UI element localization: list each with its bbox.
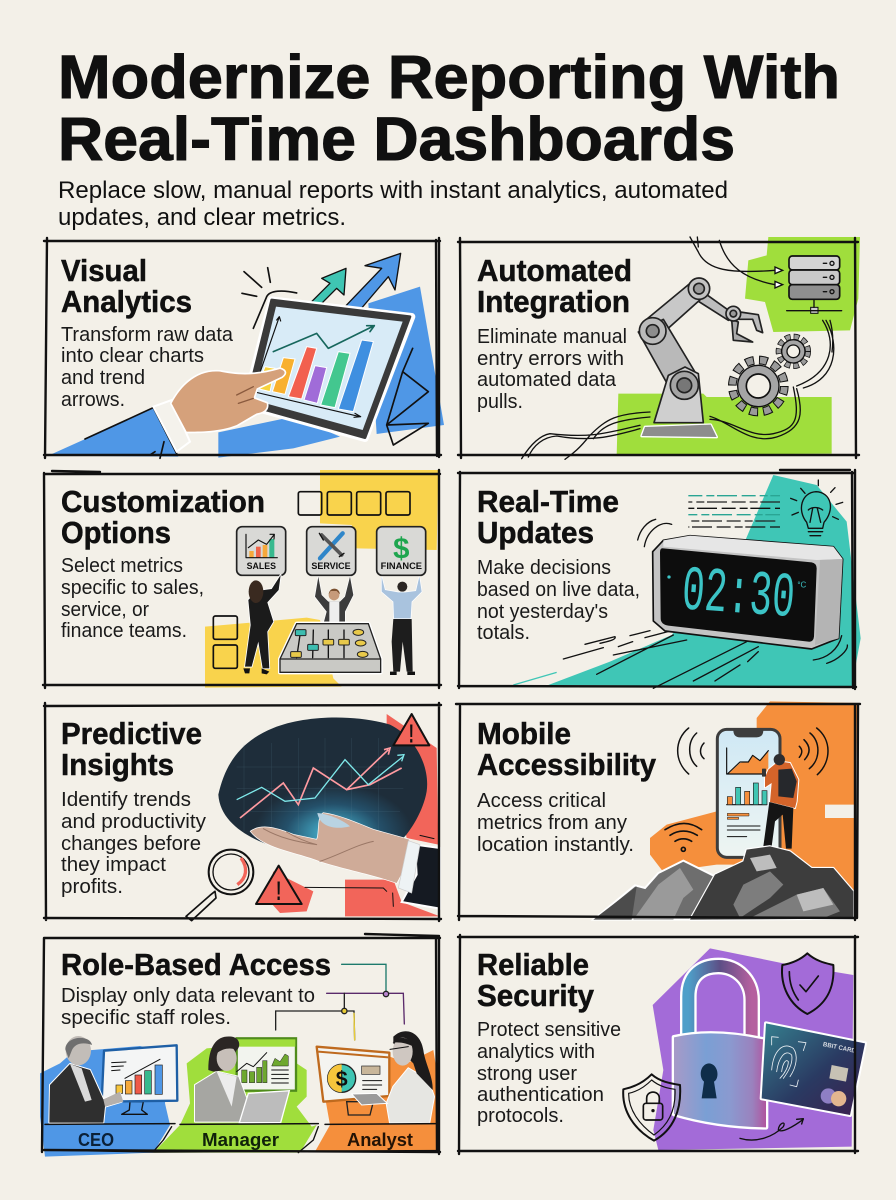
icon: warning triangle bottom: ! (276, 876, 281, 906)
CEO monitor (102, 1045, 177, 1114)
body text: into clear charts (61, 345, 204, 367)
body text: and productivity (61, 811, 206, 833)
body text: not yesterday's (477, 601, 608, 623)
illustration: hiker with phone on mountain (593, 701, 857, 920)
heading (477, 484, 619, 550)
illustration: robot arm, server, gears (522, 237, 860, 459)
padlock (674, 966, 766, 1127)
gears (732, 337, 808, 412)
card (762, 1023, 865, 1115)
body text: Select metrics (61, 555, 183, 577)
input wires (690, 237, 775, 285)
analyst monitor: $ (336, 1067, 348, 1091)
body text (477, 326, 627, 413)
hiker (762, 754, 798, 849)
panel: customization options (43, 470, 441, 688)
analyst person (352, 1031, 434, 1123)
heading (61, 253, 192, 319)
robot arm (638, 278, 763, 437)
heading: Integration (477, 284, 630, 319)
sign: service (307, 527, 356, 575)
body text: pulls. (477, 391, 523, 413)
body text: based on live data, (477, 579, 640, 601)
person: woman left (243, 575, 281, 674)
panel: automated integration (458, 237, 860, 459)
heading: Visual (61, 253, 147, 288)
title: Real-Time Dashboards (58, 105, 735, 173)
heading: Accessibility (477, 747, 657, 782)
heading: Security (477, 978, 595, 1013)
heading: Reliable (477, 947, 589, 982)
icon: warning triangle top (393, 714, 429, 749)
role labels: Manager (202, 1130, 279, 1150)
heading (477, 947, 595, 1013)
clock (653, 536, 843, 649)
illustration: tablet with chart and pointing hand (48, 253, 444, 458)
body text: authentication (477, 1084, 604, 1106)
body text (61, 789, 206, 898)
panel: mobile accessibility (456, 701, 860, 920)
clock: 02:30 (680, 556, 797, 636)
sleeve (402, 845, 440, 909)
body text (477, 1019, 621, 1127)
body text: profits. (61, 876, 123, 898)
panel: real-time updates (458, 470, 861, 689)
manager monitor (237, 1038, 296, 1091)
server stack (789, 256, 840, 313)
role labels (78, 1130, 413, 1150)
icon: warning triangle bottom (256, 866, 302, 906)
body text: Transform raw data (61, 324, 234, 346)
panel: role-based access (40, 934, 440, 1157)
subtitle (58, 177, 728, 231)
frame (43, 470, 441, 688)
title: Modernize Reporting With (58, 43, 840, 111)
frame (44, 238, 441, 458)
body text: they impact (61, 854, 166, 876)
heading: Automated (477, 253, 632, 288)
body text: protocols. (477, 1105, 564, 1127)
body text: Access critical (477, 790, 606, 812)
frame (458, 238, 859, 458)
mountains (593, 846, 853, 920)
body text: automated data (477, 369, 617, 391)
body text: Identify trends (61, 789, 191, 811)
body text: specific to sales, (61, 577, 204, 599)
body text: entry errors with (477, 348, 624, 370)
analyst monitor (317, 1047, 389, 1115)
role label bars (45, 1124, 438, 1153)
person: man right (382, 577, 422, 675)
role labels: CEO (78, 1130, 114, 1150)
heading: Options (61, 515, 171, 550)
illustration: padlock, card and shields (623, 948, 865, 1150)
body text: Eliminate manual (477, 326, 627, 348)
icon: wifi (665, 823, 702, 851)
clock: °C (797, 581, 807, 590)
body text: specific staff roles. (61, 1007, 231, 1029)
heading (61, 484, 265, 550)
heading: Mobile (477, 716, 571, 751)
heading (477, 253, 632, 319)
signal arcs (678, 728, 828, 775)
heading: Insights (61, 747, 174, 782)
heading: Real-Time (477, 484, 619, 519)
card: BBIT CARD (822, 1041, 857, 1055)
body text: analytics with (477, 1041, 595, 1063)
connector lines (276, 964, 404, 1040)
phone (717, 729, 780, 857)
body text: strong user (477, 1063, 577, 1085)
sign: sales: SALES (247, 561, 276, 571)
body text: changes before (61, 833, 201, 855)
mixer console (280, 624, 381, 672)
icon: magnifying glass (186, 850, 253, 921)
panel: reliable security (458, 935, 865, 1154)
title (58, 43, 840, 173)
manager person (195, 1036, 289, 1123)
body text: finance teams. (61, 620, 187, 642)
body text: Protect sensitive (477, 1019, 621, 1041)
sign: finance (377, 527, 426, 575)
body text: service, or (61, 599, 149, 621)
illustration: team holding metric signs above a mixer (205, 470, 438, 688)
frame (44, 703, 441, 921)
sign: service: SERVICE (311, 561, 351, 571)
illustration: digital clock with motion lines (513, 475, 861, 688)
body text (61, 324, 234, 411)
icon: warning triangle top: ! (409, 719, 414, 749)
frame (456, 704, 860, 920)
subtitle: Replace slow, manual reports with instant analytics, automated (58, 177, 728, 204)
heading: Updates (477, 515, 594, 550)
heading: Role-Based Access (61, 947, 331, 982)
sign: sales (237, 527, 286, 575)
role labels: Analyst (347, 1130, 413, 1150)
CEO person (49, 1036, 123, 1123)
icon: shield check (782, 953, 834, 1014)
icon: shield lock (623, 1074, 680, 1141)
person: woman centre (315, 577, 353, 622)
sign: finance: FINANCE (381, 561, 422, 571)
illustration: three roles with dashboards (40, 964, 438, 1157)
panel: predictive insights (44, 703, 441, 921)
body text (477, 557, 640, 644)
frame (458, 935, 858, 1154)
subtitle: updates, and clear metrics. (58, 204, 346, 231)
body text (61, 555, 204, 642)
hand (251, 813, 410, 883)
body text: and trend (61, 367, 145, 389)
heading: Customization (61, 484, 265, 519)
body text: location instantly. (477, 834, 634, 856)
heading (477, 716, 657, 782)
body text: Make decisions (477, 557, 611, 579)
body text (61, 985, 315, 1029)
body text: metrics from any (477, 812, 627, 834)
heading: Analytics (61, 284, 192, 319)
body text: arrows. (61, 389, 125, 411)
frame (42, 934, 440, 1154)
heading: Predictive (61, 716, 202, 751)
body text (477, 790, 634, 856)
frame (458, 470, 856, 689)
illustration: glowing forecast chart above open hand (186, 714, 440, 921)
icon: light bulb (791, 480, 843, 536)
panel: visual analytics (44, 238, 444, 458)
heading (61, 716, 202, 782)
sign: finance: $ (393, 532, 409, 565)
body text: totals. (477, 622, 530, 644)
body text: Display only data relevant to (61, 985, 315, 1007)
